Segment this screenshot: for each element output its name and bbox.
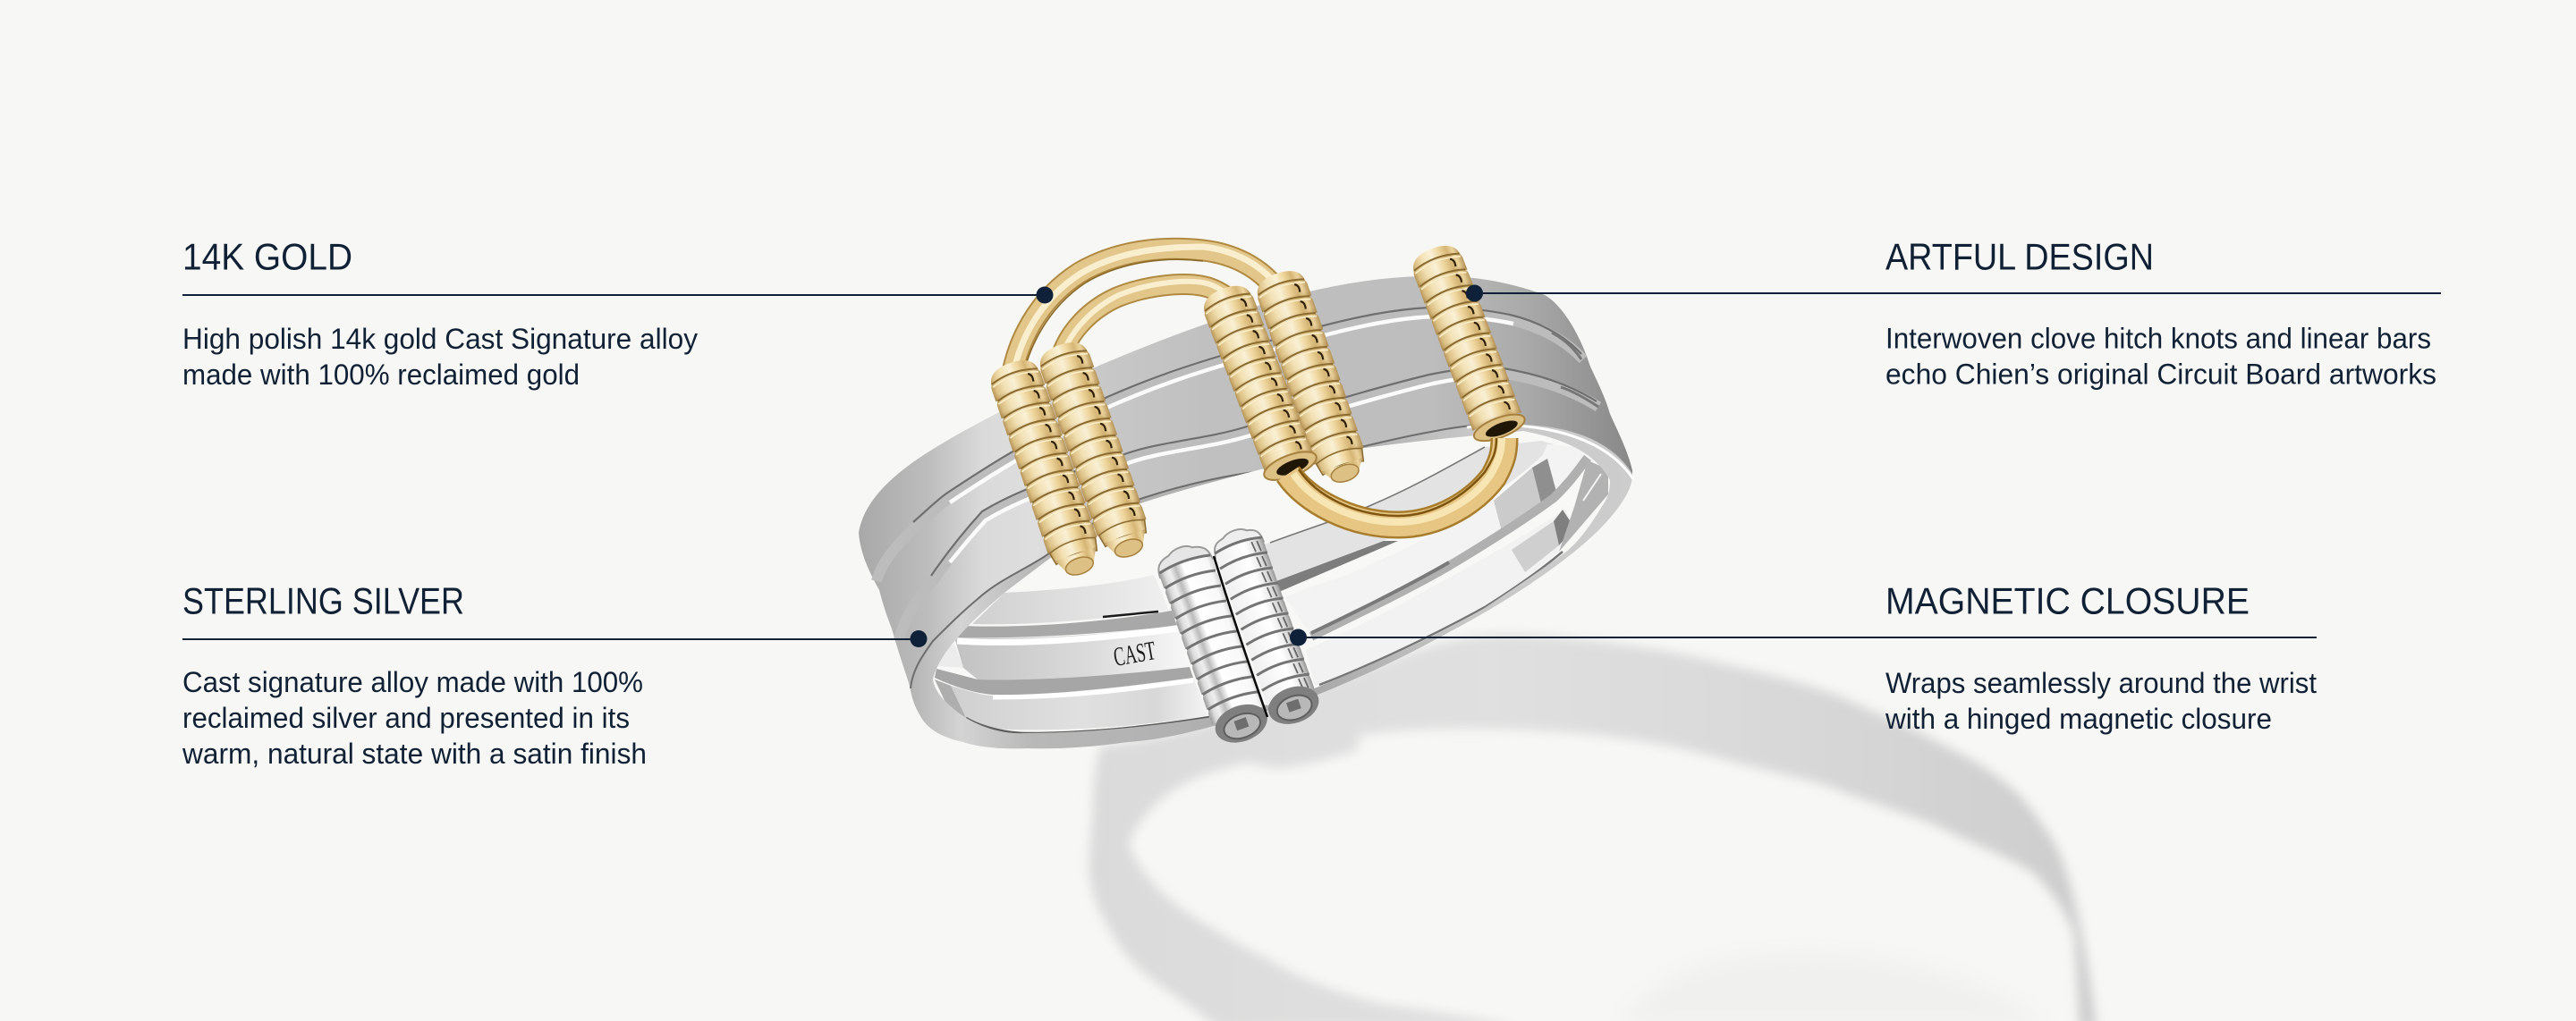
description: Interwoven clove hitch knots and linear bars	[1885, 322, 2431, 354]
left hinge coil	[1153, 538, 1274, 749]
heading: ARTFUL DESIGN	[1885, 236, 2154, 277]
left reflection	[935, 679, 966, 718]
left section upper	[972, 575, 1169, 624]
right strip B	[1543, 444, 1580, 454]
groove 1	[954, 611, 1177, 637]
description	[182, 666, 647, 770]
bangle opening	[933, 431, 1610, 733]
strip D shade	[1512, 521, 1559, 572]
silver magnetic closure	[1153, 522, 1324, 749]
bangle: silver bands	[859, 275, 1633, 748]
right groove wedge	[1276, 541, 1398, 592]
split line	[1214, 556, 1267, 717]
marker dot	[1466, 284, 1483, 302]
strip B shade	[1494, 468, 1540, 528]
description: echo Chien’s original Circuit Board artworks	[1885, 358, 2436, 390]
inner arch	[1061, 284, 1239, 358]
gold coil 1	[986, 355, 1106, 582]
silver bands silhouette	[859, 275, 1632, 748]
rim outer line	[911, 424, 1521, 688]
right strip A	[1250, 441, 1554, 581]
callout: artful design	[1466, 236, 2441, 390]
leader line	[1474, 292, 2441, 294]
gold lower tube	[1288, 438, 1504, 525]
slit 2 between middle and lower band	[899, 367, 1598, 639]
rim top highlight	[1467, 426, 1633, 479]
callout: sterling silver	[182, 579, 927, 770]
outer arch	[1011, 249, 1277, 384]
description	[1885, 667, 2317, 735]
bracelet cast shadow	[1089, 634, 2097, 1021]
cast engraving: CAST	[1111, 636, 1158, 672]
interior sections	[935, 441, 1608, 733]
groove 2	[935, 667, 1193, 695]
description: made with 100% reclaimed gold	[182, 359, 580, 391]
lower section stripe	[993, 680, 1193, 697]
leader line	[182, 638, 918, 640]
strip D dark facet	[1554, 510, 1570, 545]
strip C	[1311, 458, 1588, 637]
cast band white stripe	[957, 629, 1178, 642]
lower section	[951, 679, 1209, 730]
cast band	[954, 625, 1190, 679]
gold arch tubes	[1011, 247, 1277, 384]
gold coil 4	[1252, 266, 1372, 489]
heading: STERLING SILVER	[182, 579, 464, 622]
description	[1885, 322, 2436, 390]
left pale facet	[937, 644, 963, 668]
strip D	[1306, 510, 1574, 686]
marker dot	[1290, 629, 1307, 646]
slit 1 between top and middle band	[877, 308, 1583, 581]
description	[182, 323, 698, 391]
gold coil 3	[1197, 279, 1320, 485]
leader line	[1298, 637, 2317, 638]
gold coil 2	[1035, 337, 1156, 564]
heading: 14K GOLD	[182, 236, 352, 277]
right reflection	[1559, 460, 1608, 552]
description: Wraps seamlessly around the wrist	[1885, 667, 2317, 699]
inner rim line	[966, 717, 1209, 733]
strip B dark facet	[1532, 459, 1556, 503]
callout: 14k gold	[182, 236, 1054, 391]
rim	[911, 424, 1632, 748]
callout: magnetic closure	[1290, 579, 2317, 735]
rim inner line right	[1319, 552, 1563, 685]
marker dot	[911, 630, 927, 647]
marker dot	[1036, 286, 1054, 304]
description: Cast signature alloy made with 100%	[182, 666, 643, 698]
description: reclaimed silver and presented in its	[182, 702, 630, 734]
description: High polish 14k gold Cast Signature alloy	[182, 323, 698, 355]
description: warm, natural state with a satin finish	[182, 738, 647, 770]
description: with a hinged magnetic closure	[1885, 703, 2272, 735]
heading: MAGNETIC CLOSURE	[1885, 579, 2250, 622]
leader line	[182, 294, 1045, 296]
groove 1 dark spec	[1103, 612, 1158, 617]
gold coil 5	[1407, 240, 1528, 446]
right hinge coil	[1209, 522, 1324, 730]
